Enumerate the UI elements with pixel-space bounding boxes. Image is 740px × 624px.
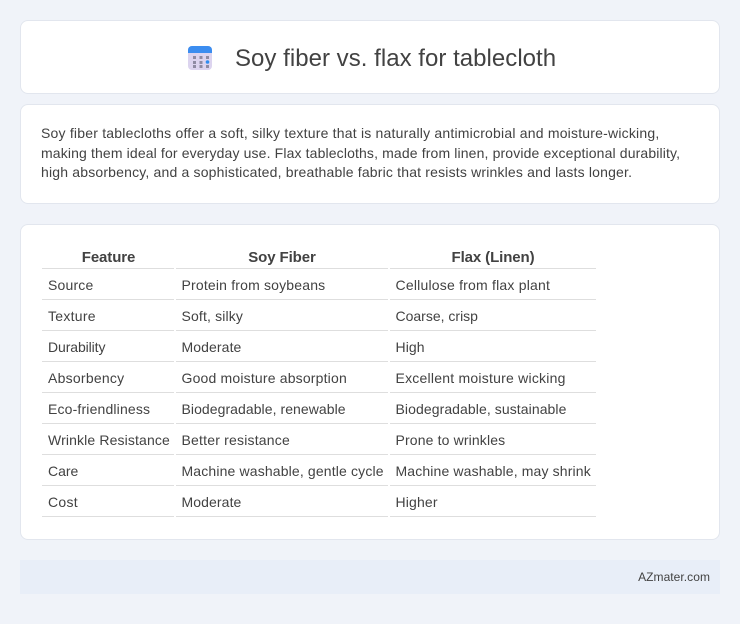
row: eco-friendliness	[42, 401, 596, 424]
header row: Flax (Linen)	[452, 249, 534, 266]
row: absorbency: Good moisture absorption	[182, 370, 347, 386]
title: Soy fiber vs. flax for tablecloth	[235, 45, 556, 72]
row: source: Cellulose from flax plant	[396, 277, 550, 293]
row: source: Source	[48, 277, 93, 293]
row: absorbency	[42, 370, 596, 393]
row: absorbency: Excellent moisture wicking	[396, 370, 566, 386]
row: cost: Higher	[396, 494, 438, 510]
row: source	[42, 277, 596, 300]
row: wrinkle resistance: Better resistance	[182, 432, 290, 448]
row: eco-friendliness: Biodegradable, renewable	[182, 401, 346, 417]
row: texture: Coarse, crisp	[396, 308, 478, 324]
row: care: Machine washable, gentle cycle	[182, 463, 384, 479]
panel: summary	[20, 104, 720, 204]
row: cost	[42, 494, 596, 517]
row: wrinkle resistance: Prone to wrinkles	[396, 432, 505, 448]
comparison table	[42, 249, 596, 517]
row: wrinkle resistance: Wrinkle Resistance	[48, 432, 170, 448]
summary text: high absorbency, and a sophisticated, breathable fabric that resists wrinkles and lasts longer.	[41, 164, 632, 180]
row: durability: Durability	[48, 339, 105, 355]
row: cost: Moderate	[182, 494, 241, 510]
row: texture: Soft, silky	[182, 308, 243, 324]
row: durability: High	[396, 339, 425, 355]
summary text: Soy fiber tablecloths offer a soft, silky texture that is naturally antimicrobial and moisture-wicking,	[41, 125, 659, 141]
row: eco-friendliness: Eco-friendliness	[48, 401, 150, 417]
row: absorbency: Absorbency	[48, 370, 124, 386]
row: source: Protein from soybeans	[182, 277, 325, 293]
footer bar	[20, 560, 720, 594]
row: care: Machine washable, may shrink	[396, 463, 591, 479]
row: durability: Moderate	[182, 339, 241, 355]
row: wrinkle resistance	[42, 432, 596, 455]
row: texture: Texture	[48, 308, 96, 324]
row: care	[42, 463, 596, 486]
header row: Soy Fiber	[248, 249, 316, 266]
header row	[42, 249, 596, 269]
row: cost: Cost	[48, 494, 78, 510]
row: eco-friendliness: Biodegradable, sustainable	[396, 401, 566, 417]
panel: title card	[20, 20, 720, 94]
summary text: making them ideal for everyday use. Flax tablecloths, made from linen, provide exceptional durability,	[41, 145, 680, 161]
row: texture	[42, 308, 596, 331]
header row: Feature	[82, 249, 135, 266]
panel: comparison table	[20, 224, 720, 540]
footer credit: AZmater.com	[638, 570, 710, 584]
icon: calendar	[188, 46, 212, 70]
row: durability	[42, 339, 596, 362]
row: care: Care	[48, 463, 78, 479]
summary text	[41, 125, 680, 180]
